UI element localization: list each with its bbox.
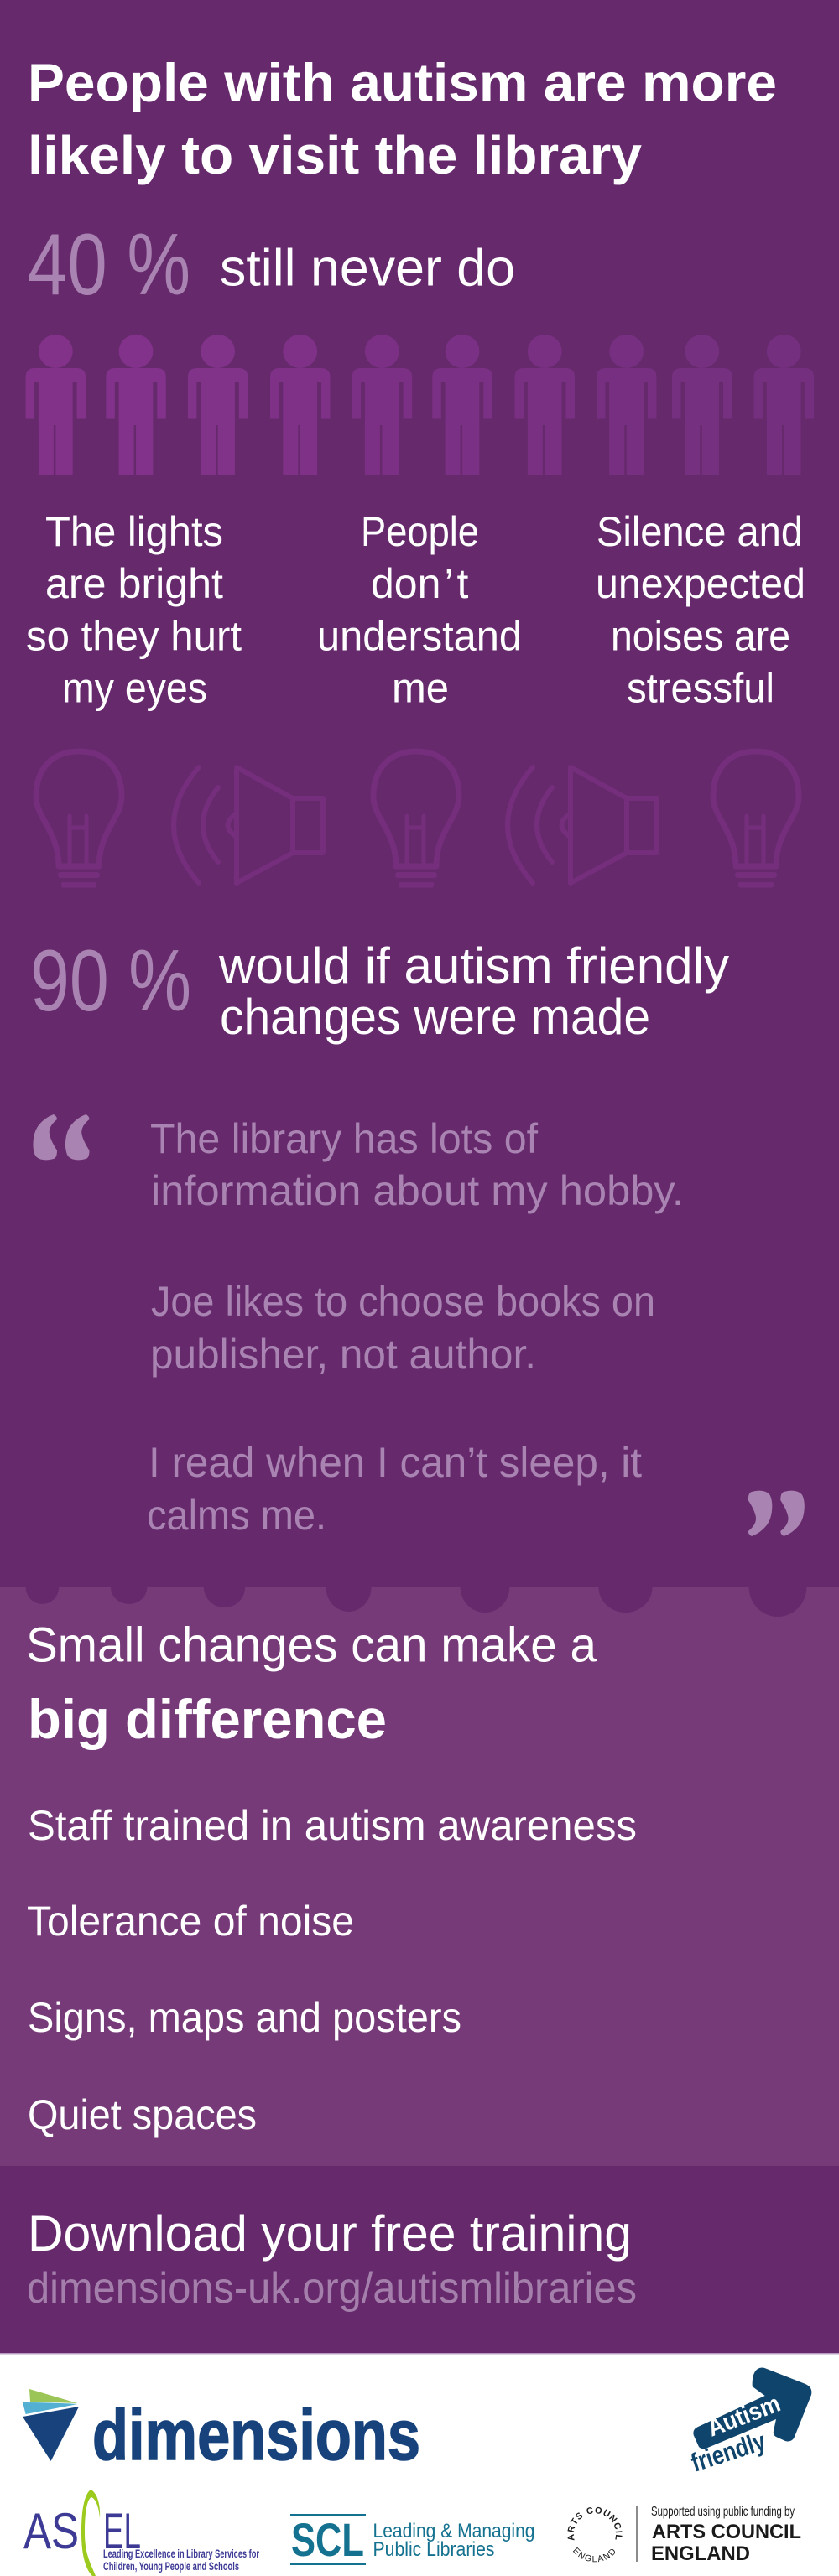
text column: silence and noises [596, 508, 805, 711]
statistic: 90 percent would if changes were made: changes were made [220, 989, 650, 1045]
title: likely to visit the library [28, 125, 642, 185]
quote text: Joe likes to choose books on [151, 1278, 655, 1325]
logo: SCL: Leading & Managing [373, 2520, 535, 2542]
logo: ASCEL [23, 2490, 259, 2576]
panel: logos [0, 2353, 839, 2576]
text column: lights [26, 508, 242, 711]
logo: ASCEL: EL [103, 2503, 141, 2559]
text column: people: understand [317, 612, 522, 659]
heading: Small changes can make a [26, 1618, 597, 1672]
scalloped drips [26, 1587, 806, 1617]
text column: people [317, 508, 522, 711]
quote text: The library has lots of [150, 1115, 538, 1162]
list of changes: Signs, maps and posters [28, 1994, 461, 2041]
logo: Arts Council England: ENGLAND [651, 2542, 750, 2565]
download heading: Download your free training [28, 2205, 632, 2262]
icon row: bulbs and speakers [36, 751, 799, 887]
statistic: 90 percent would if changes were made: 90 % [30, 932, 191, 1030]
list of changes [27, 1802, 637, 2138]
text column: people: People [361, 508, 479, 555]
icon: closing quote mark [748, 1491, 805, 1536]
quote text [147, 1115, 684, 1539]
heading: big difference [28, 1688, 387, 1750]
quote text: I read when I can’t sleep, it [149, 1439, 642, 1486]
text column: people: me [392, 664, 449, 711]
text column: silence and noises: unexpected [596, 560, 805, 607]
list of changes: Quiet spaces [28, 2091, 257, 2138]
icon: speaker 1 [174, 767, 323, 883]
logo: SCL [290, 2513, 535, 2566]
text column: silence and noises: Silence and [597, 508, 803, 555]
statistic: 40 percent still never do: still never do [220, 240, 515, 297]
logo: autism friendly arrow: friendly [687, 2426, 769, 2478]
panel: download call to action [0, 2166, 839, 2354]
list of changes: Staff trained in autism awareness [28, 1802, 637, 1849]
quote text: publisher, not author. [150, 1331, 536, 1378]
logo: SCL: Public Libraries [373, 2538, 495, 2561]
icon: speaker 2 [508, 767, 657, 883]
text column: lights: The lights [45, 508, 223, 555]
text column: lights: my eyes [62, 664, 207, 711]
panel: small changes [0, 1587, 839, 2166]
logo: Arts Council England [567, 2505, 801, 2565]
download URL: dimensions-uk.org/autismlibraries [27, 2264, 637, 2313]
text column: lights: are bright [45, 560, 223, 607]
icon: light bulb 3 [713, 751, 799, 887]
logo: SCL: SCL [291, 2513, 364, 2566]
title [28, 52, 777, 185]
statistic: 90 percent would if changes were made: would if autism friendly [218, 937, 729, 994]
text column: silence and noises: stressful [627, 664, 774, 711]
logo: Arts Council England: ENGLAND [572, 2547, 615, 2563]
statistic: 40 percent still never do [28, 216, 515, 314]
title: People with autism are more [28, 52, 777, 112]
logo: autism friendly arrow [687, 2368, 811, 2478]
logo: ASCEL: Leading Excellence in Library Services for [103, 2547, 259, 2560]
logo: Arts Council England: ARTS COUNCIL [652, 2521, 801, 2543]
logo: Arts Council England: ARTS COUNCIL [567, 2507, 623, 2541]
icon: opening quote mark [33, 1114, 89, 1160]
text column: lights: so they hurt [26, 612, 242, 659]
text column: silence and noises: noises are [611, 612, 790, 659]
icon: light bulb 1 [36, 751, 122, 887]
text column: people: don’t [371, 560, 469, 607]
statistic: 90 percent would if changes were made [30, 932, 729, 1045]
panel: statistics and quotes [0, 0, 839, 1587]
logo: autism friendly arrow: Autism [704, 2390, 784, 2443]
logo: ASCEL: AS [23, 2503, 79, 2559]
icon: light bulb 2 [373, 751, 459, 887]
statistic: 40 percent still never do: 40 % [28, 216, 190, 314]
icon row: ten people [26, 335, 814, 475]
logo: ASCEL: Children, Young People and Schools [103, 2559, 239, 2573]
logo: dimensions [23, 2389, 420, 2475]
quote text: calms me. [147, 1492, 326, 1539]
heading [26, 1618, 597, 1750]
quote text: information about my hobby. [151, 1167, 684, 1214]
list of changes: Tolerance of noise [27, 1898, 354, 1945]
logo: dimensions: dimensions [92, 2396, 420, 2475]
